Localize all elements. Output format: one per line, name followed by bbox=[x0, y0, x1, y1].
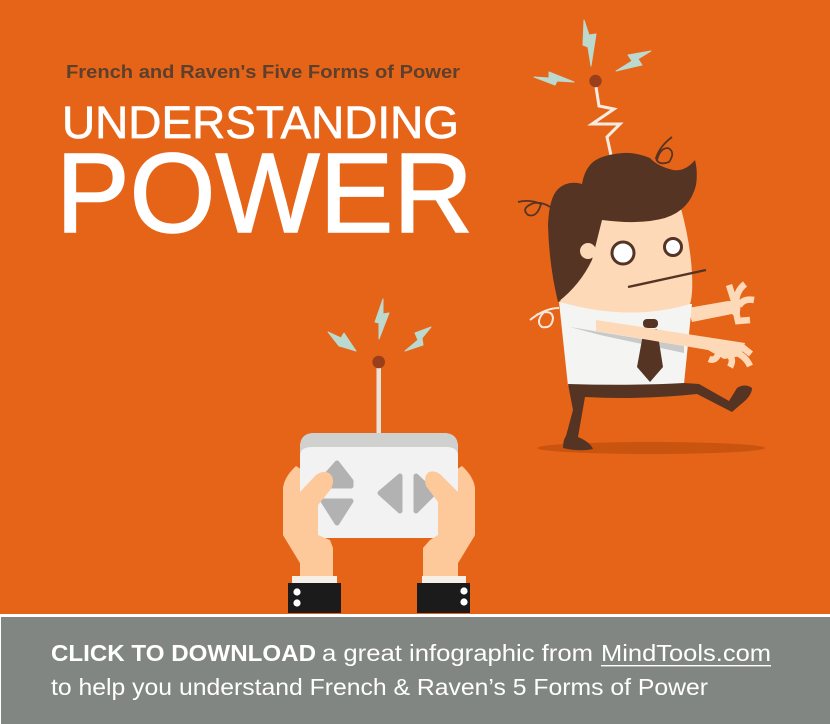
left hand bbox=[283, 472, 333, 577]
button: left bbox=[380, 476, 400, 511]
back of left hand bbox=[283, 466, 318, 563]
hair curls bbox=[518, 137, 672, 216]
remote control and hands bbox=[283, 299, 475, 613]
right cuff bbox=[417, 576, 470, 613]
shirt shadow bbox=[570, 327, 684, 353]
footer line two: to help you understand French & Raven’s 5 Forms of Power bbox=[51, 674, 708, 700]
footer line one: CLICK TO DOWNLOAD bbox=[51, 640, 316, 666]
icon: lightning bolts above remote bbox=[328, 299, 431, 351]
shoulder curl bbox=[530, 308, 559, 327]
trousers and shoes bbox=[563, 383, 752, 450]
face bbox=[560, 205, 692, 313]
ground shadow bbox=[537, 442, 765, 454]
back arm and hand bbox=[688, 284, 754, 322]
front arm and hand bbox=[596, 320, 751, 367]
remote antenna bbox=[376, 368, 381, 438]
back of right hand bbox=[440, 466, 475, 563]
antenna tip bbox=[589, 75, 602, 87]
remote body bbox=[300, 433, 458, 538]
icon: lightning bolts above head bbox=[534, 20, 651, 85]
button: up bbox=[322, 463, 351, 486]
button: down bbox=[323, 501, 351, 523]
right eye bbox=[664, 238, 682, 256]
footer line one: a great infographic from bbox=[322, 640, 593, 666]
title: understanding: UNDERSTANDING bbox=[62, 97, 459, 148]
button: right bbox=[416, 476, 434, 511]
right hand bbox=[423, 471, 475, 577]
zigzag antenna bbox=[592, 87, 620, 169]
character: shocked businessman bbox=[518, 20, 765, 454]
footer line one bbox=[51, 640, 771, 666]
footer call-to-action panel bbox=[1, 617, 830, 724]
title: power: POWER bbox=[56, 130, 473, 256]
subtitle heading: French and Raven's Five Forms of Power bbox=[66, 61, 460, 82]
hair bbox=[548, 153, 697, 302]
white shirt bbox=[559, 302, 692, 386]
mouth bbox=[628, 270, 706, 287]
tie bbox=[637, 319, 663, 382]
left cuff bbox=[288, 576, 341, 613]
antenna tip bbox=[372, 356, 385, 368]
ear bbox=[580, 243, 596, 259]
left eye bbox=[612, 242, 634, 264]
footer line one: MindTools.com bbox=[601, 640, 771, 666]
